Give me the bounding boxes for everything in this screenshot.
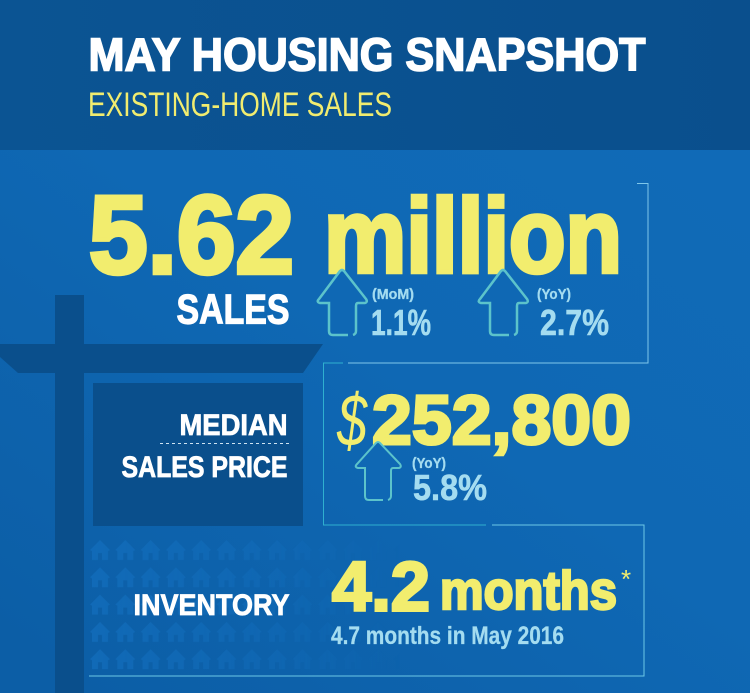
icon: up arrow price <box>356 442 401 500</box>
price value: 252,800 <box>372 381 631 459</box>
median label: MEDIAN <box>180 409 288 442</box>
asterisk: * <box>621 564 631 594</box>
house pattern <box>90 540 250 669</box>
title: MAY HOUSING SNAPSHOT <box>88 28 646 80</box>
MoM value: 1.1% <box>371 302 431 343</box>
median divider <box>160 442 290 444</box>
inventory label: INVENTORY <box>134 589 290 622</box>
frame: sales <box>348 184 648 363</box>
sales label: SALES <box>176 286 290 332</box>
frame: median price <box>324 363 486 525</box>
YoY label: (YoY) <box>537 286 571 303</box>
sign post <box>0 295 323 693</box>
inventory comparison: 4.7 months in May 2016 <box>331 622 564 650</box>
icon: up arrow MoM <box>318 270 367 335</box>
dollar sign: $ <box>336 379 368 462</box>
panel: median sales price label box <box>93 383 303 526</box>
header band <box>0 0 750 150</box>
sales price label: SALES PRICE <box>122 451 288 484</box>
icon: up arrow YoY <box>479 270 528 335</box>
subtitle: EXISTING-HOME SALES <box>88 86 392 124</box>
sales unit: million <box>324 178 622 295</box>
YoY value: 2.7% <box>540 302 609 343</box>
frame: inventory <box>89 525 644 676</box>
sales number: 5.62 <box>89 174 294 297</box>
inventory value: 4.2 <box>332 548 430 626</box>
MoM label: (MoM) <box>372 286 414 303</box>
price YoY value: 5.8% <box>413 467 487 508</box>
price YoY label: (YoY) <box>412 455 446 472</box>
inventory unit: months <box>440 561 617 621</box>
